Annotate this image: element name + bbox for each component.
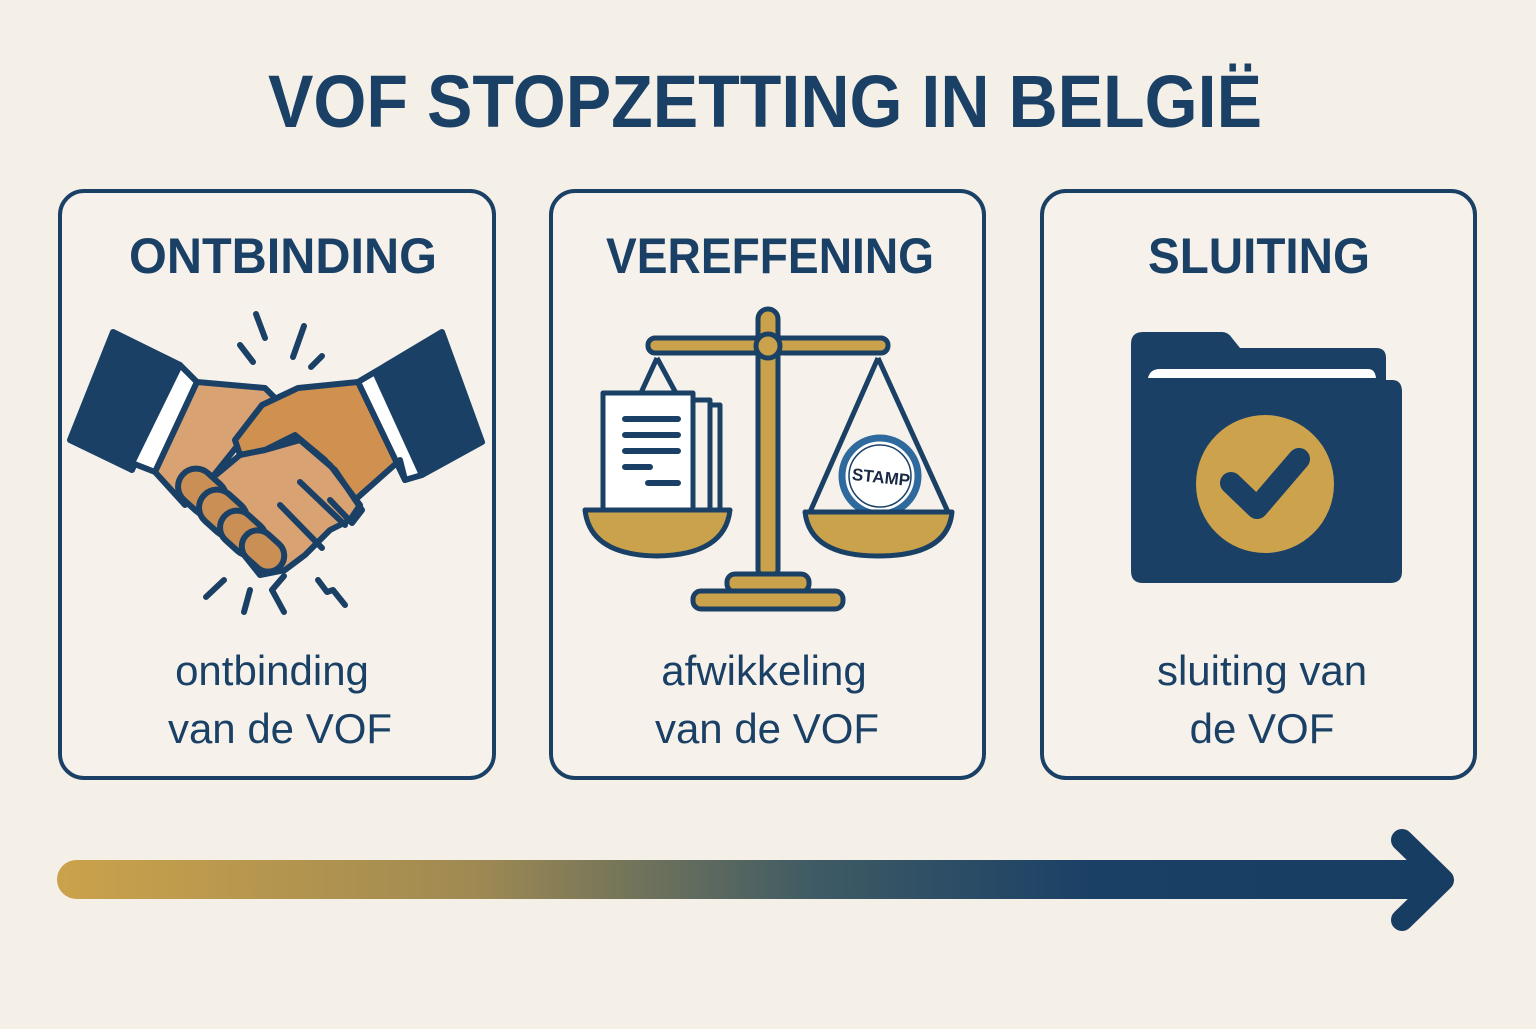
icon: folder with check [1131,332,1402,583]
arrow: timeline [57,840,1443,920]
panel: ontbinding: van de VOF [168,705,392,752]
panel: ontbinding [60,191,494,778]
icon: handshake [70,314,482,612]
heading: ontbinding: ONTBINDING [129,228,437,284]
title: VOF STOPZETTING IN BELGIË [268,60,1262,143]
panel: sluiting [1042,191,1475,778]
text: afwikkeling van de VOF: afwikkeling [661,647,867,694]
heading: sluiting: SLUITING [1148,228,1370,284]
text: sluiting van de VOF: sluiting van [1157,647,1367,694]
panel: vereffening [551,191,984,778]
panel: sluiting: de VOF [1190,705,1334,752]
icon: scale: STAMP [851,465,911,490]
text: ontbinding van de VOF: ontbinding [175,647,369,694]
heading: vereffening: VEREFFENING [606,228,934,284]
panel: vereffening: van de VOF [655,705,879,752]
icon: scale [585,309,952,609]
